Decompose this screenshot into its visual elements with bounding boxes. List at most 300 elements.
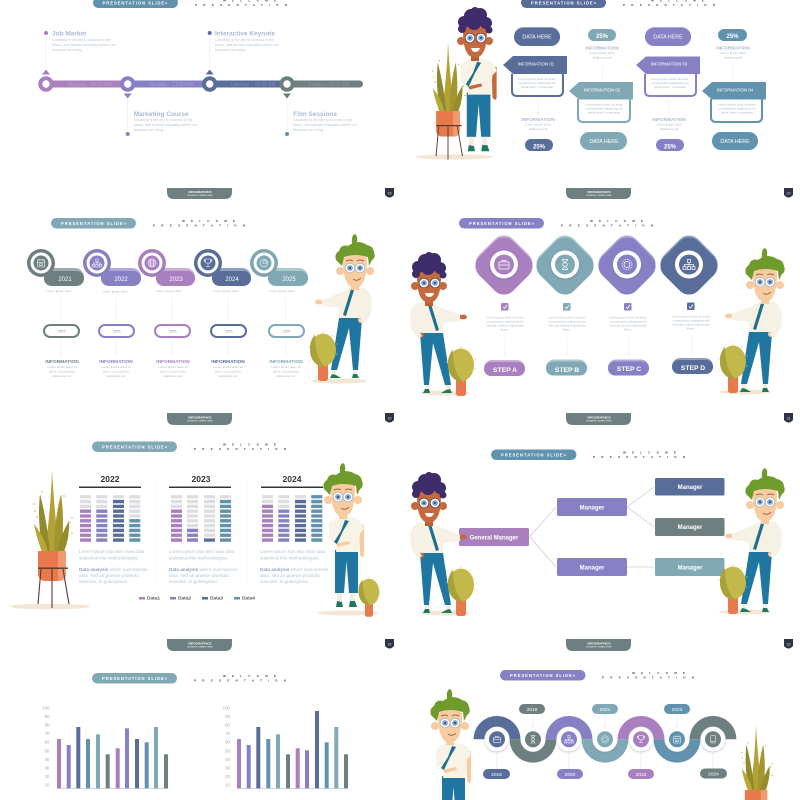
item: Job Market (44, 30, 117, 52)
information text: INFORMATION (99, 359, 133, 365)
information text: Lorem ipsum dolor sit (213, 365, 243, 369)
year 2022 (83, 249, 141, 286)
slide 29: information cards (415, 0, 793, 199)
data pill: bottom 4: DATA HERE (720, 139, 750, 145)
captions: Lorem ipsum dolor (102, 290, 128, 294)
information text: Lorem ipsum dolor sit (158, 365, 188, 369)
chart: 2023 (169, 474, 238, 584)
information labels: Lorem ipsum dolor (525, 122, 551, 126)
information text (45, 359, 303, 378)
chart: 2022: data. sed an graecie prompta (79, 573, 139, 578)
item: Interactive Keynote: future, and primary education where our (215, 43, 280, 47)
box: manager level 3 middle: Manager (678, 525, 703, 531)
step diamond C (593, 230, 661, 300)
percentage pills: 25% (664, 144, 677, 150)
chart: 2022: inveniire, in gubergreno (79, 579, 127, 584)
chart: 2023: Lorem Ipsum has two main data (169, 549, 235, 554)
item: Film Sessions: teachers can bring. (293, 128, 324, 132)
timeline bar: Monday - 10:00 AM (68, 82, 111, 88)
illustration: plant (10, 470, 90, 609)
bar chart right: 20 (225, 774, 231, 779)
slide 28: timeline (40, 0, 394, 199)
illustration: left presenter (410, 252, 476, 396)
footer tab: BUSINESS COMPANY HERE (586, 194, 612, 197)
data pill: top 1: DATA HERE (522, 34, 552, 40)
footer tab: INFOGRAPHICS (188, 190, 212, 194)
box: General Manager (459, 528, 529, 546)
information labels: adipiscing elit (724, 56, 742, 60)
step text: Aenean viverra malesuada (549, 324, 586, 328)
header: WELCOME (632, 671, 685, 675)
header: PRESENTATION (561, 224, 654, 228)
header: WELCOME (223, 442, 276, 446)
item: Job Market: teachers can bring. (52, 48, 83, 52)
page number (784, 413, 793, 422)
legend: Data1 (147, 596, 160, 602)
step text: consectetuer adipiscing elit (548, 320, 586, 324)
chart: 2023: statistical this methodologies. (169, 556, 229, 560)
percent pills: 25% (168, 328, 177, 334)
information text: adipiscing elit. (52, 374, 72, 378)
item: Job Market: Job Market (52, 30, 87, 38)
percent pills (44, 325, 304, 337)
data pill: top 1 (514, 27, 560, 46)
header (92, 442, 287, 452)
year 2021: 2021 (58, 277, 72, 283)
footer tab (167, 413, 232, 425)
card: information 03: INFORMATION 03 (651, 62, 688, 66)
slide 32: stacked data columns (10, 442, 394, 651)
box: manager level 2 bottom (557, 558, 627, 576)
checkboxes (501, 302, 694, 310)
footer tab: BUSINESS COMPANY HERE (586, 646, 612, 648)
information labels (521, 45, 750, 131)
step pill D (672, 358, 713, 374)
footer tab (566, 413, 631, 425)
page number (385, 413, 394, 422)
card: information 03: ligula lorem, consequat (654, 85, 686, 89)
footer tab: BUSINESS COMPANY HERE (187, 646, 213, 648)
bar chart right: 10 (225, 782, 231, 788)
header (521, 0, 716, 8)
illustration: standing character (430, 689, 471, 800)
header: PRESENTATION (593, 455, 686, 459)
connectors (505, 336, 692, 356)
year 2024 (194, 249, 251, 286)
item: Interactive Keynote: Interactive Keynote (215, 30, 275, 38)
chart: 2024: data. sed an graecie prompta (260, 573, 320, 578)
bar chart left (42, 706, 168, 789)
bar chart right: 60 (225, 740, 231, 745)
bar chart right: 90 (225, 714, 231, 719)
information text: adipiscing elit. (106, 374, 126, 378)
information labels: INFORMATION (521, 117, 555, 123)
item: Interactive Keynote (208, 30, 280, 52)
item: Film Sessions: future, and primary education where our (293, 123, 358, 127)
box: manager level 2 top: Manager (580, 505, 605, 511)
year 2025 (250, 249, 308, 286)
bar chart right: 40 (225, 757, 231, 762)
legend: Data3 (210, 596, 223, 602)
wave band (479, 721, 731, 757)
bar chart right: 70 (225, 731, 231, 736)
step text: libero. (624, 328, 632, 332)
step pill A: STEP A (493, 367, 517, 374)
header (491, 450, 686, 460)
header: WELCOME (223, 674, 276, 678)
item: Interactive Keynote: teachers can bring. (215, 48, 246, 52)
step pill C (608, 360, 649, 376)
node 2022 (629, 727, 653, 751)
year 2025: 2025 (282, 277, 296, 283)
bar chart right: 50 (225, 748, 231, 753)
information text: Lorem ipsum dolor sit (101, 365, 131, 369)
node 2018 (485, 727, 509, 751)
illustration: left presenter (410, 472, 476, 616)
timeline bar: Friday – 10:00 AM (309, 82, 350, 88)
page number (385, 188, 394, 198)
bar chart left: 60 (45, 740, 50, 745)
year pills: 2019 (527, 707, 538, 713)
percentage pills: 25% (533, 144, 546, 150)
step pill A (484, 360, 525, 376)
footer tab (566, 188, 631, 199)
slide 30: year milestones (27, 218, 394, 425)
chart: 2024 (260, 474, 329, 584)
legend: Data2 (178, 596, 191, 602)
information labels: INFORMATION (585, 45, 619, 51)
information text: INFORMATION (45, 359, 79, 365)
step text: Lorem ipsum dolor sit amet, (672, 314, 710, 318)
node 2019 (521, 727, 545, 751)
information text: adipiscing elit. (163, 374, 183, 378)
year pills: 2020 (565, 772, 576, 778)
box: manager level 3 bottom: Manager (678, 565, 703, 571)
chart: 2023: Data analysis which summarizes (169, 567, 238, 572)
box: manager level 3 top: Manager (678, 485, 703, 491)
chart: 2024: statistical this methodologies. (260, 556, 320, 560)
information labels: Lorem ipsum dolor (589, 51, 615, 55)
header: PRESENTATION (602, 676, 695, 680)
item: Marketing Course (126, 111, 198, 136)
step pill C: STEP C (617, 366, 641, 373)
bar chart right: 80 (225, 723, 231, 728)
year pills: 2022 (636, 772, 647, 778)
information text: INFORMATION (156, 359, 190, 365)
connectors (61, 298, 286, 356)
footer tab: INFOGRAPHICS (188, 416, 212, 420)
header: PRESENTATION (194, 678, 287, 682)
item: Film Sessions: Creativity is the key to success in the (293, 118, 352, 122)
card: information 02 (569, 82, 633, 122)
item: Film Sessions: Film Sessions (293, 111, 337, 118)
data pill: bottom 2 (580, 132, 627, 150)
header: PRESENTATION (194, 447, 287, 451)
item: Job Market: future, and primary education where our (52, 43, 117, 47)
percentage pills: 25% (596, 34, 609, 40)
header: PRESENTATION SLIDE» (531, 0, 597, 6)
chart: 2022: Lorem Ipsum has two main data (79, 549, 145, 554)
captions (46, 289, 295, 294)
item: Job Market: Creativity is the key to success in the (52, 38, 111, 42)
illustration: cactus and presenter (308, 234, 375, 384)
information text: amet, consectetuer (160, 370, 186, 374)
information labels: adipiscing elit (529, 127, 547, 131)
information text: amet, consectetuer (49, 370, 75, 374)
header: WELCOME (182, 219, 235, 223)
step pill B: STEP B (555, 367, 579, 374)
header (459, 218, 654, 228)
box: manager level 3 top (655, 478, 724, 496)
chart: 2022: Data analysis which summarizes (79, 567, 148, 572)
card: information 02: ligula lorem, consequat (588, 110, 620, 114)
chart: 2024: 2024 (283, 474, 302, 484)
card: information 01 (503, 56, 567, 96)
timeline bar: Tuesday – 10:00 AM (230, 82, 276, 88)
percentage pills (525, 29, 747, 151)
header: PRESENTATION SLIDE» (510, 673, 576, 678)
item: Marketing Course: Marketing Course (134, 111, 189, 118)
chart: 2023: 2023 (192, 474, 211, 484)
page number: 32 (388, 642, 392, 646)
card: information 01: ligula lorem, consequat (521, 85, 553, 89)
timeline bar (40, 37, 363, 131)
header: PRESENTATION (195, 3, 288, 7)
slide 34: bar charts (42, 673, 348, 789)
percent pills: 25% (57, 328, 66, 334)
footer tab: INFOGRAPHICS (587, 642, 611, 646)
information text: Lorem ipsum dolor sit (271, 365, 301, 369)
header: WELCOME (623, 450, 676, 454)
step text: Aenean viverra malesuada (673, 322, 710, 326)
step text: Aenean viverra malesuada (610, 324, 647, 328)
step text: consectetuer adipiscing elit (486, 320, 524, 324)
year pills (483, 704, 727, 779)
step diamond A (470, 230, 538, 300)
footer tab: INFOGRAPHICS (587, 190, 611, 194)
bar chart left: 40 (45, 757, 50, 762)
box: manager level 3 bottom (655, 558, 724, 576)
step text: consectetuer adipiscing elit (609, 320, 647, 324)
legend: Data4 (242, 596, 255, 602)
captions: Lorem ipsum dolor (156, 289, 182, 293)
step text (486, 314, 710, 332)
box: manager level 2 bottom: Manager (580, 565, 605, 571)
information text: amet, consectetuer (273, 370, 299, 374)
card: information 02: Lorem ipsum dolor sit amet, (585, 102, 623, 106)
bar chart left: 30 (45, 765, 50, 770)
step text: Lorem ipsum dolor sit amet, (486, 316, 524, 320)
header: PRESENTATION (623, 3, 716, 7)
data pill: bottom 4 (712, 132, 758, 150)
year 2021 (27, 249, 84, 286)
year 2024: 2024 (225, 277, 239, 283)
card: information 03: Lorem ipsum dolor sit amet, (651, 77, 689, 81)
data pill: top 3 (645, 27, 691, 46)
footer tab (167, 188, 232, 199)
step text: Lorem ipsum dolor sit amet, (548, 316, 586, 320)
step diamond D (655, 230, 723, 300)
card: information 04 (702, 82, 766, 122)
year 2023: 2023 (169, 277, 183, 283)
node 2024 (701, 727, 725, 751)
year 2023 (138, 249, 195, 286)
bar chart left: 10 (45, 782, 50, 788)
year pills: 2024 (708, 771, 719, 777)
item: Marketing Course: Creativity is the key to success in the (134, 118, 193, 122)
chart: 2024: Data analysis which summarizes (260, 567, 329, 572)
year pills: 2018 (491, 772, 502, 778)
information text: adipiscing elit. (276, 374, 296, 378)
card: information 01: INFORMATION 01 (518, 62, 555, 66)
connector lines (530, 487, 654, 567)
illustration: standing character and cactus (318, 463, 381, 617)
footer tab (167, 639, 232, 651)
chart: 2023: data. sed an graecie prompta (169, 573, 229, 578)
step text: Aenean viverra malesuada (487, 324, 524, 328)
card: information 04: Lorem ipsum dolor sit amet, (718, 102, 756, 106)
card: information 01: consectetuer adipiscing elit (518, 81, 556, 85)
page number: 29 (786, 192, 790, 196)
footer tab: BUSINESS COMPANY HERE (187, 194, 213, 197)
node 2023 (665, 727, 689, 751)
percent pills: 25% (282, 328, 291, 334)
header: PRESENTATION SLIDE» (102, 676, 168, 681)
chart: 2024: inveniire, in gubergreno (260, 579, 308, 584)
card: information 03 (636, 56, 700, 96)
card: information 02: INFORMATION 02 (584, 88, 621, 92)
page number: 28 (388, 192, 392, 196)
item: Marketing Course: teachers can bring. (134, 128, 164, 132)
information text: amet, consectetuer (215, 370, 241, 374)
box: manager level 2 top (557, 498, 627, 516)
page number (784, 639, 793, 648)
slide 33: org chart (410, 450, 793, 651)
step text: libero. (563, 328, 571, 332)
connectors (497, 714, 713, 769)
bar chart left: 20 (45, 774, 50, 779)
footer tab (566, 639, 631, 651)
item: Marketing Course: future, and primary education where our (134, 123, 198, 127)
bar chart left: 80 (45, 723, 50, 728)
page number: 31 (786, 416, 790, 420)
header (92, 673, 287, 684)
data pill: top 3: DATA HERE (653, 34, 683, 40)
footer tab: INFOGRAPHICS (587, 416, 611, 420)
footer tab: BUSINESS COMPANY HERE (187, 420, 213, 422)
slide 35: wave timeline (430, 670, 773, 800)
information labels: INFORMATION (716, 45, 750, 51)
timeline bar: Monday – 12:00 PM (149, 82, 194, 88)
bar chart right: 100 (223, 706, 231, 710)
chart: 2022: 2022 (101, 474, 120, 484)
legend (139, 596, 255, 602)
header (93, 0, 288, 8)
card: information 01: Lorem ipsum dolor sit amet, (518, 77, 556, 81)
header: PRESENTATION SLIDE» (102, 444, 168, 450)
captions: Lorem ipsum dolor (213, 289, 239, 293)
card: information 04: consectetuer adipiscing elit (718, 106, 756, 110)
information text: Lorem ipsum dolor sit (47, 365, 77, 369)
header (51, 218, 246, 228)
percent pills: 25% (112, 328, 121, 334)
header (500, 670, 695, 680)
page number (385, 639, 394, 648)
box: manager level 3 middle (655, 518, 724, 536)
bar chart right (223, 706, 348, 789)
page number: 33 (786, 642, 790, 646)
card: information 02: consectetuer adipiscing elit (585, 106, 623, 110)
chart: 2024: Lorem Ipsum has two main data (260, 549, 326, 554)
card: information 03: consectetuer adipiscing elit (651, 81, 689, 85)
step text: consectetuer adipiscing elit (672, 318, 710, 322)
step pill B (546, 360, 587, 376)
illustration: right presenter (718, 248, 785, 394)
captions: Lorem ipsum dolor (46, 289, 72, 293)
information text: amet, consectetuer (103, 370, 129, 374)
bar chart left: 50 (45, 748, 50, 753)
chart: 2022: statistical this methodologies. (79, 556, 139, 560)
step pill D: STEP D (681, 365, 705, 372)
step text: libero. (501, 328, 509, 332)
header: PRESENTATION SLIDE» (102, 0, 168, 6)
illustration: plant and standing character (415, 7, 497, 160)
captions: Lorem ipsum dolor (269, 289, 295, 293)
header: PRESENTATION SLIDE» (469, 221, 535, 226)
item: Film Sessions (285, 111, 358, 136)
year 2022: 2022 (114, 277, 128, 283)
chart: 2022 (79, 474, 148, 584)
bar chart right: 30 (225, 765, 231, 770)
header: PRESENTATION SLIDE» (61, 221, 127, 226)
bar chart left: 100 (42, 706, 50, 710)
year pills: 2021 (600, 707, 611, 713)
header: PRESENTATION SLIDE» (501, 452, 567, 458)
header: WELCOME (590, 219, 643, 223)
footer tab: BUSINESS COMPANY HERE (586, 420, 612, 422)
information text: adipiscing elit. (218, 374, 238, 378)
percent pills: 25% (224, 328, 233, 334)
information labels: adipiscing elit (593, 56, 611, 60)
footer tab: INFOGRAPHICS (188, 642, 212, 646)
information labels: INFORMATION (652, 117, 686, 123)
information labels: Lorem ipsum dolor (656, 122, 682, 126)
information labels: adipiscing elit (660, 127, 678, 131)
percentage pills: 25% (726, 34, 739, 40)
chart: 2023: inveniire, in gubergreno (169, 579, 217, 584)
page number (784, 188, 793, 198)
illustration: right presenter (718, 468, 785, 614)
item: Interactive Keynote: Creativity is the key to success in the (215, 38, 274, 42)
page number: 30 (388, 416, 392, 420)
data pill: bottom 2: DATA HERE (589, 139, 619, 145)
card: information 04: ligula lorem, consequat (721, 110, 753, 114)
step text: libero. (687, 326, 695, 330)
node 2020 (557, 727, 581, 751)
header: PRESENTATION (153, 224, 246, 228)
year pills: 2023 (672, 707, 683, 713)
information labels: Lorem ipsum dolor (720, 51, 746, 55)
information text: INFORMATION (211, 359, 245, 365)
box: General Manager: General Manager (470, 535, 519, 541)
bar chart left: 70 (45, 731, 50, 736)
slide 31: steps (410, 218, 793, 425)
illustration: plant (741, 725, 773, 800)
step text: Lorem ipsum dolor sit amet, (609, 316, 647, 320)
bar chart left: 90 (45, 714, 50, 719)
step diamond B (531, 230, 599, 300)
information text: INFORMATION (269, 359, 303, 365)
